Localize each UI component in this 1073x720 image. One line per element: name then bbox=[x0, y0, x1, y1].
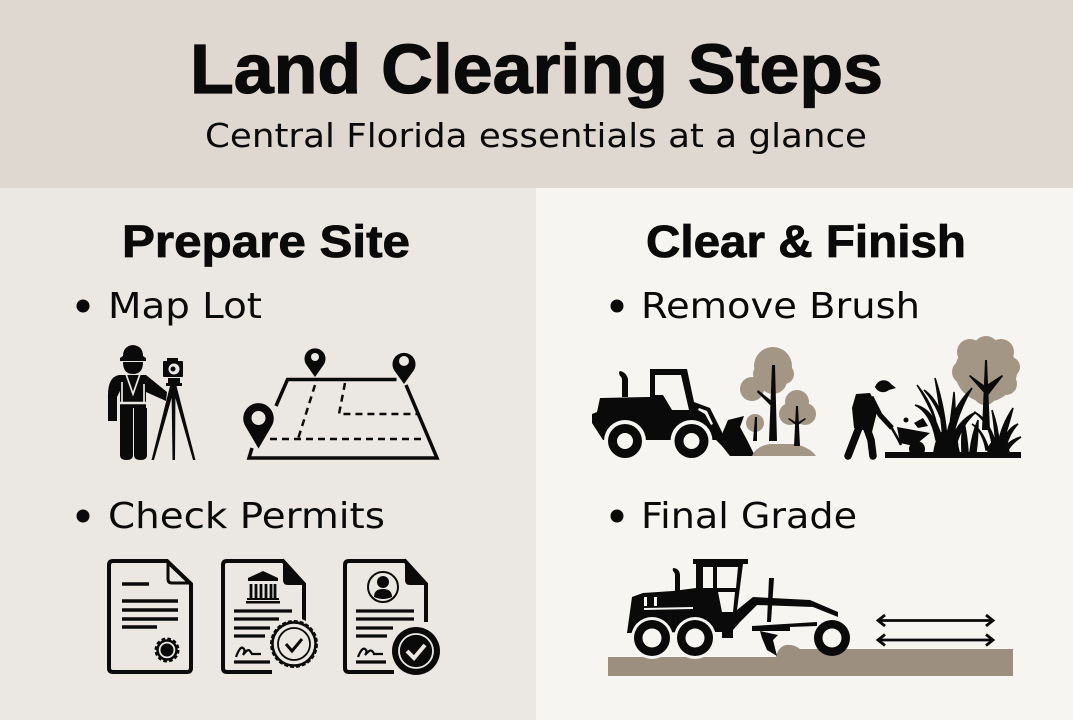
pin: left large bbox=[242, 402, 274, 450]
panel: clear and finish bbox=[536, 188, 1073, 720]
panel: header band bbox=[0, 0, 1073, 188]
bullet: map lot: Map Lot bbox=[108, 286, 262, 327]
icon: document with gear bbox=[109, 561, 191, 672]
icon: government permit with seal bbox=[223, 561, 320, 672]
icon: personal permit with check bbox=[345, 561, 442, 677]
bullet: check permits: Check Permits bbox=[108, 496, 385, 537]
icon: small trees and soil mound bbox=[740, 347, 816, 456]
icon: graded ground bbox=[608, 645, 1013, 676]
bullet: remove brush: Remove Brush bbox=[641, 286, 920, 327]
bullet: final grade: Final Grade bbox=[641, 496, 857, 537]
pin hole: left large bbox=[252, 411, 266, 425]
pin: top middle bbox=[304, 348, 326, 377]
heading: prepare site: Prepare Site bbox=[122, 216, 410, 267]
subtitle: Central Florida essentials at a glance bbox=[205, 116, 867, 155]
icon: loader bbox=[592, 369, 755, 462]
icon: worker with wheelbarrow bbox=[848, 380, 1021, 458]
pin hole: top middle bbox=[311, 353, 319, 361]
arrows: grading direction bbox=[878, 615, 993, 646]
icon: lot map with pins bbox=[242, 348, 437, 458]
title: Land Clearing Steps bbox=[190, 30, 883, 108]
icon: brush and large tree bbox=[915, 336, 1021, 452]
icon: surveyor with tripod bbox=[108, 345, 196, 460]
heading: clear and finish: Clear & Finish bbox=[646, 216, 966, 267]
panel: prepare site bbox=[0, 188, 536, 720]
pin: top right bbox=[392, 353, 416, 384]
pin hole: top right bbox=[399, 356, 409, 366]
icon: motor grader bbox=[627, 559, 850, 659]
